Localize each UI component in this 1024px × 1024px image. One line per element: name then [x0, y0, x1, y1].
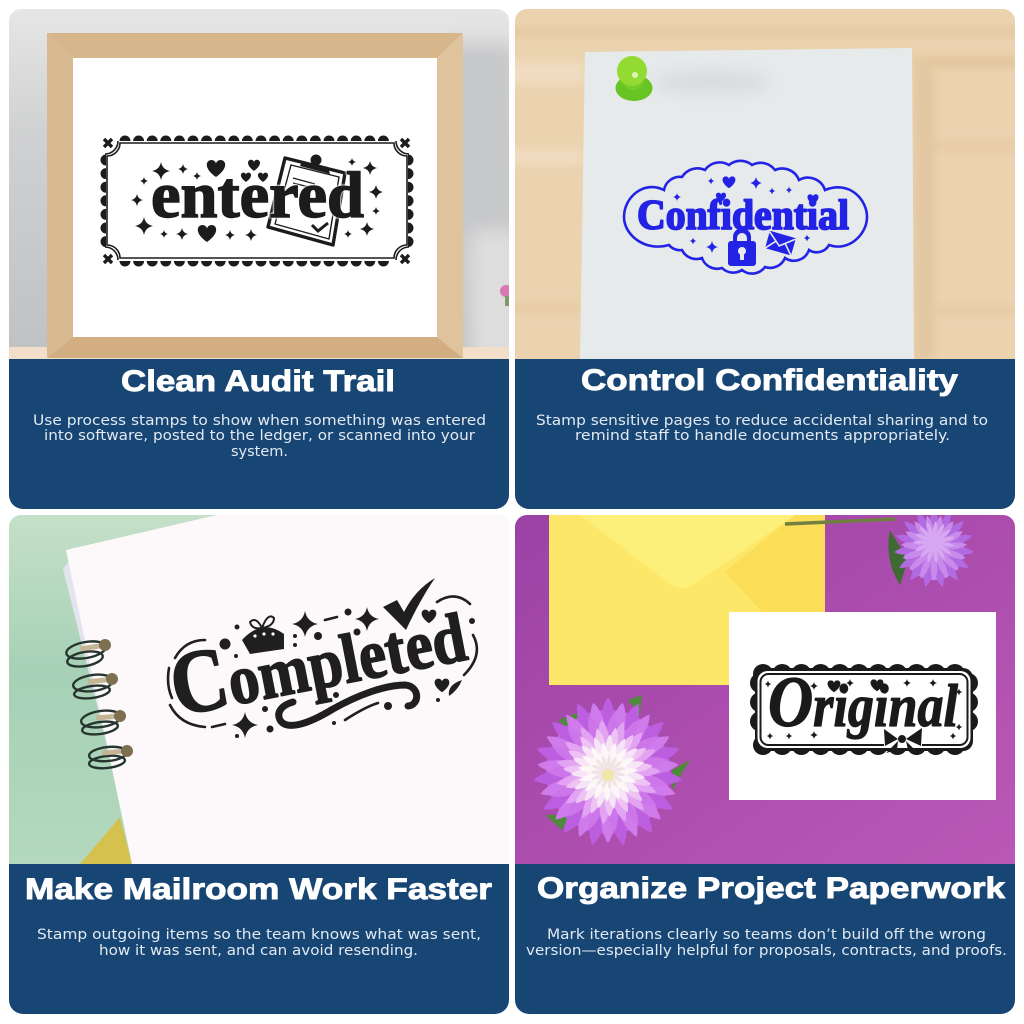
caption panel: [515, 359, 1015, 509]
body text: how it was sent, and can avoid resending.: [99, 943, 418, 959]
stamp: entered: [104, 139, 409, 263]
large aster flower: [534, 695, 690, 846]
icon: spiral binding rings: [65, 639, 133, 770]
sparkles and hearts: [673, 176, 819, 253]
picture frame: [47, 33, 463, 358]
heading: Organize Project Paperwork: [537, 872, 1005, 905]
cloud outline: [624, 161, 867, 274]
body text: remind staff to handle documents appropriately.: [575, 428, 950, 444]
icon: cake: [242, 616, 284, 654]
photo: envelope, flowers and card: [515, 508, 1015, 864]
sparkles, dots and hearts: [202, 607, 475, 738]
icon: padlock: [728, 228, 756, 266]
stamp: confidential: [624, 161, 867, 274]
body text: [536, 413, 988, 444]
stamp word: entered: [151, 159, 364, 232]
panel: control confidentiality: [505, 9, 1024, 509]
icon: bow: [884, 728, 922, 753]
body text: Stamp outgoing items so the team knows what was sent,: [37, 927, 481, 943]
caption panel: [515, 864, 1015, 1014]
stamp: completed: [162, 578, 477, 738]
yellow folder corner: [80, 817, 132, 864]
heading: Make Mailroom Work Faster: [25, 873, 492, 906]
photo: spiral notebook: [9, 515, 509, 864]
flourish and dashed arcs: [168, 596, 477, 727]
heading: Clean Audit Trail: [121, 365, 395, 398]
body text: system.: [231, 444, 288, 460]
body text: [37, 927, 481, 959]
stamp word: Completed: [162, 582, 473, 736]
photo: framed print on wall: [9, 9, 520, 360]
notebook page: [66, 515, 509, 864]
body text: Mark iterations clearly so teams don’t build off the wrong: [547, 927, 986, 943]
icon: envelope: [765, 231, 796, 256]
body text: [526, 927, 1007, 959]
stamp word: Confidential: [637, 193, 849, 239]
caption panel: [9, 359, 509, 509]
icon: check mark: [383, 578, 435, 630]
photo: pinned paper on wood: [505, 9, 1024, 360]
stamp: original: [755, 662, 973, 753]
panel: make mailroom work faster: [9, 515, 509, 1014]
stem and top flower: [784, 515, 974, 587]
panel: organize project paperwork: [515, 508, 1015, 1014]
panel: clean audit trail: [9, 9, 520, 509]
sparkles and hearts: [764, 679, 962, 740]
body text: version—especially helpful for proposals, contracts, and proofs.: [526, 943, 1007, 959]
white card: [729, 612, 996, 800]
yellow envelope: [549, 515, 825, 685]
paper sheet: [580, 48, 914, 359]
icon: green push pin: [616, 56, 652, 101]
stamp word: Original: [768, 662, 958, 742]
body text: Stamp sensitive pages to reduce accidental sharing and to: [536, 413, 988, 429]
body text: Use process stamps to show when something was entered: [33, 413, 486, 429]
body text: [33, 413, 486, 460]
heading: Control Confidentiality: [581, 364, 958, 397]
body text: into software, posted to the ledger, or scanned into your: [44, 428, 475, 444]
icon: clipboard: [268, 154, 345, 245]
sparkles and hearts: [131, 158, 383, 242]
caption panel: [9, 864, 509, 1014]
